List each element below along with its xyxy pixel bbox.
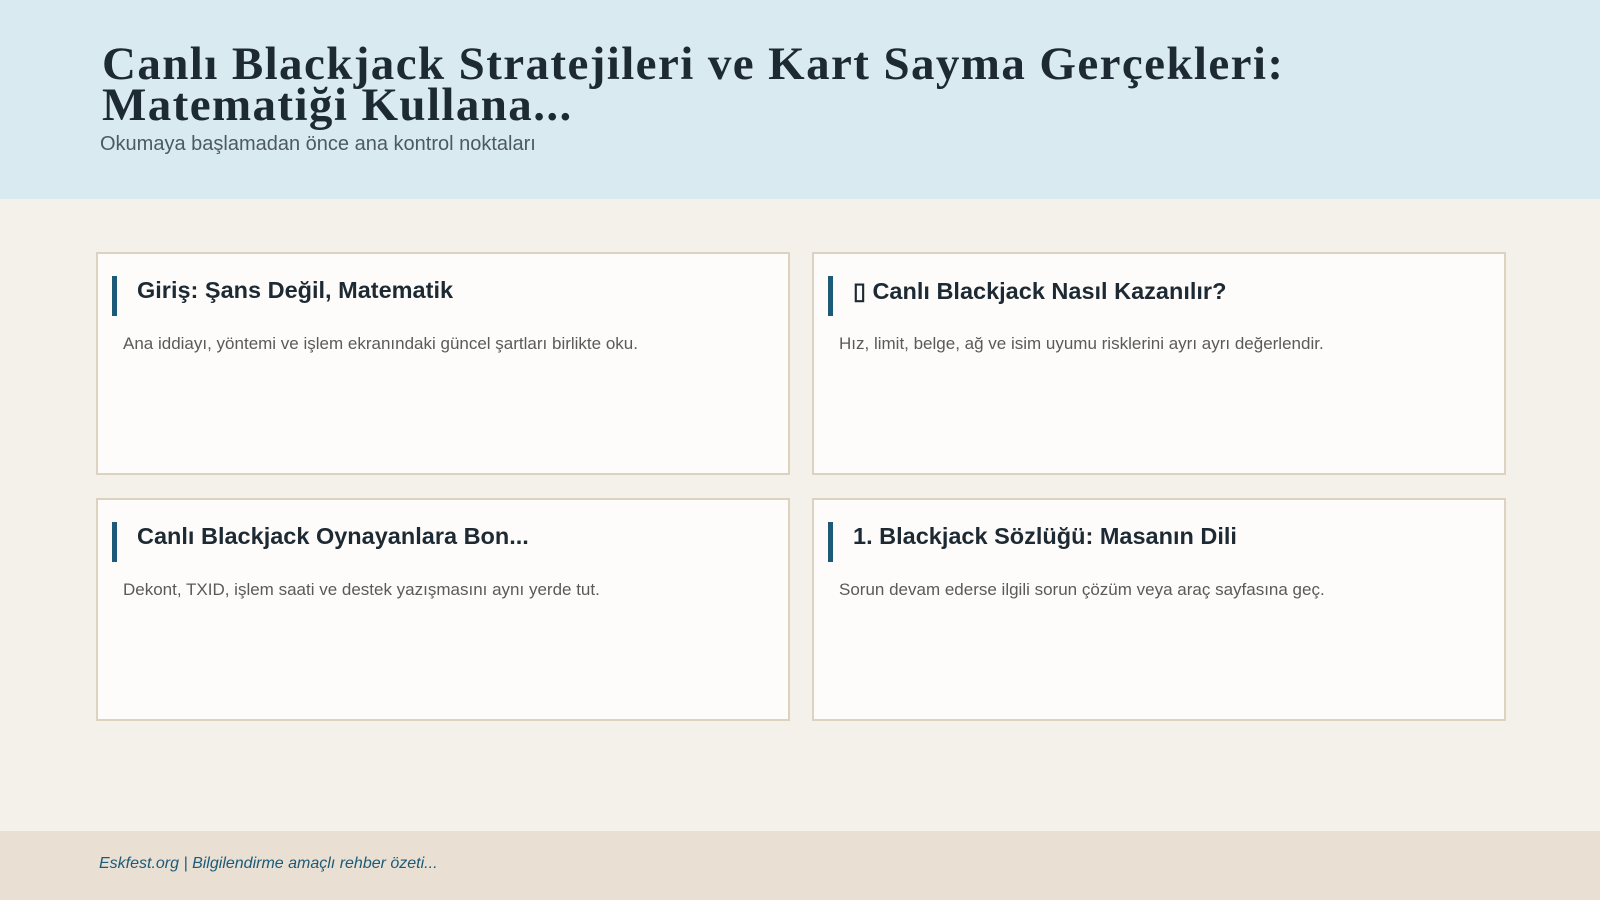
panel: giriş [96,252,790,475]
panel: bonus [96,498,790,721]
heading: ▯ Canlı Blackjack Nasıl Kazanılır? [853,278,1226,304]
heading: 1. Blackjack Sözlüğü: Masanın Dili [853,523,1237,549]
text block: Hız, limit, belge, ağ ve isim uyumu risklerini ayrı ayrı değerlendir. [839,334,1324,353]
title: Canlı Blackjack Stratejileri ve Kart Sayma Gerçekleri: Matematiği Kullana... [102,38,1284,131]
panel: sözlük [812,498,1506,721]
text block: Dekont, TXID, işlem saati ve destek yazışmasını aynı yerde tut. [123,580,600,599]
heading: Giriş: Şans Değil, Matematik [137,277,453,303]
panel: nasıl kazanılır [812,252,1506,475]
footer [0,831,1600,900]
text block: Ana iddiayı, yöntemi ve işlem ekranındaki güncel şartları birlikte oku. [123,334,638,353]
text block: Sorun devam ederse ilgili sorun çözüm veya araç sayfasına geç. [839,580,1325,599]
footer: Eskfest.org | Bilgilendirme amaçlı rehber özeti... [99,855,438,872]
header band [0,0,1600,199]
subtitle: Okumaya başlamadan önce ana kontrol noktaları [100,133,536,155]
heading: Canlı Blackjack Oynayanlara Bon... [137,523,529,549]
